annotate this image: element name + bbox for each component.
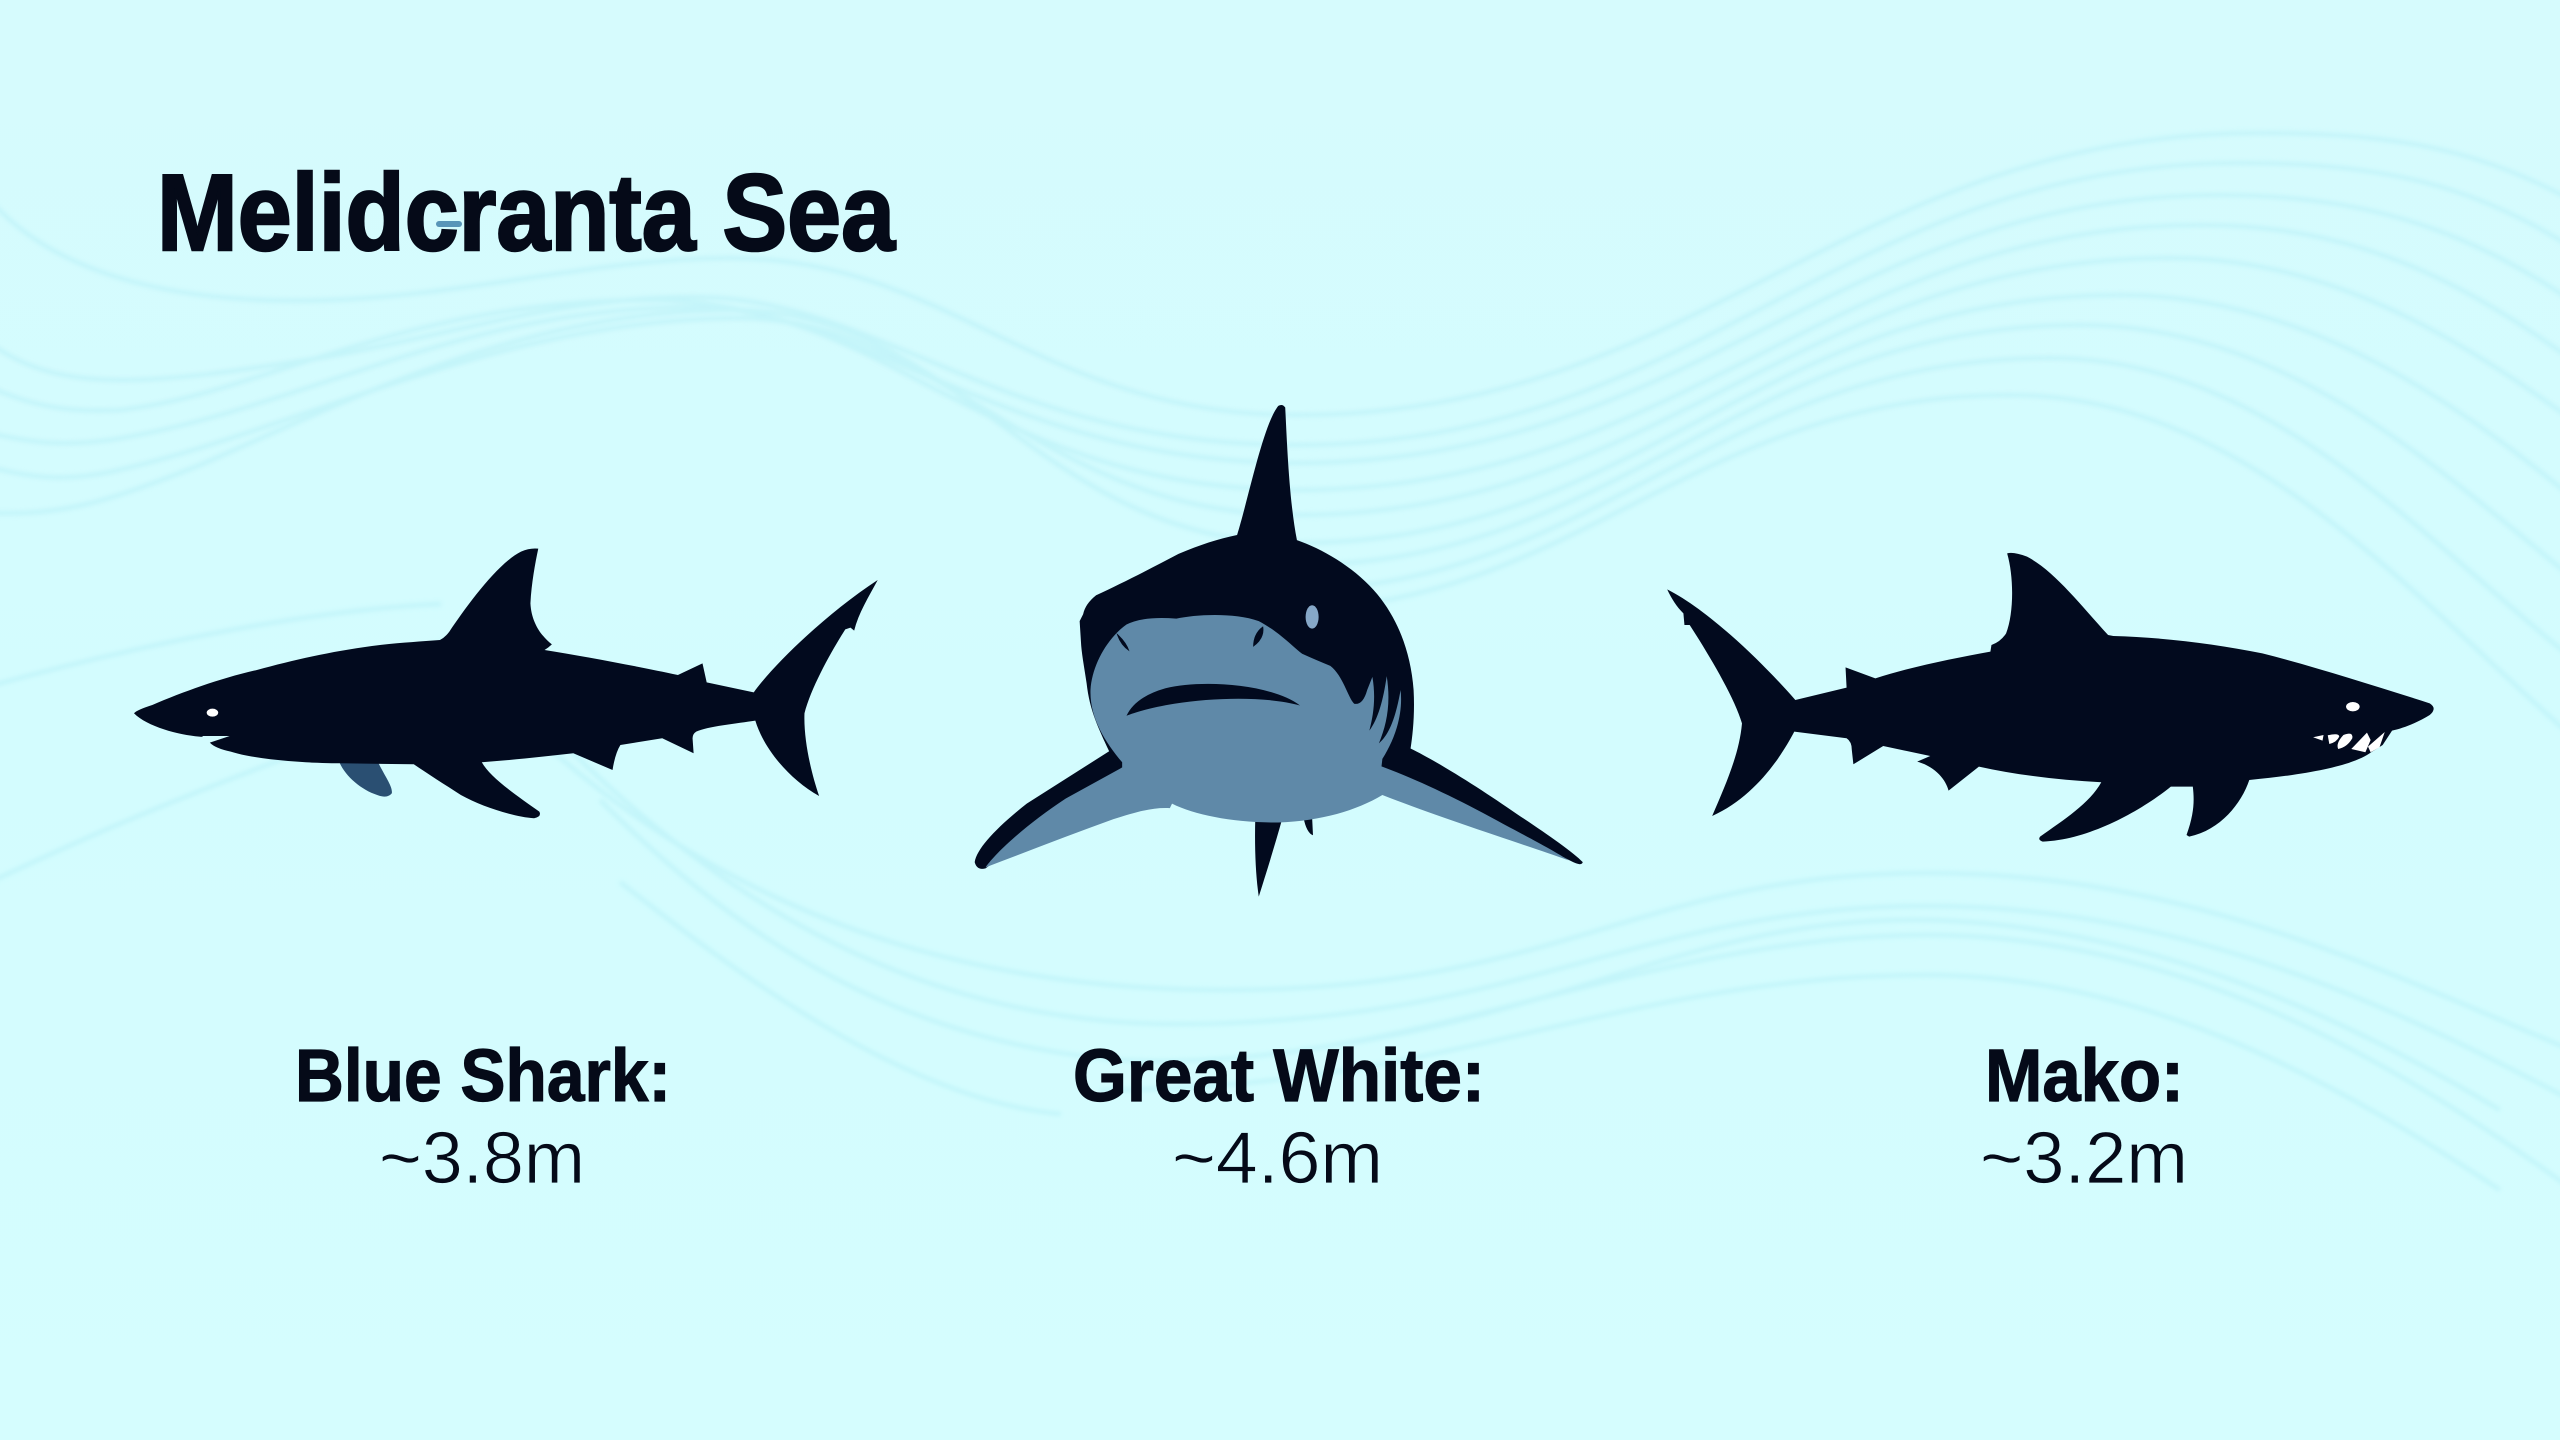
shark: blue shark side silhouette <box>134 548 878 818</box>
body silhouette <box>1667 553 2434 842</box>
shark: great white front view <box>975 405 1583 897</box>
label: mako: ~3.2m <box>1980 1118 2188 1199</box>
label: great white: Great White: <box>1073 1034 1485 1117</box>
label: great white <box>1073 1034 1485 1199</box>
tail fins <box>1255 817 1313 897</box>
body silhouette <box>134 548 878 818</box>
mouth <box>1126 684 1300 716</box>
label: great white: ~4.6m <box>1172 1118 1383 1199</box>
label: blue shark: ~3.8m <box>379 1118 585 1199</box>
eye <box>207 709 218 717</box>
teeth <box>2313 732 2385 752</box>
nostrils <box>1117 626 1263 651</box>
background wave lines <box>0 133 2560 1210</box>
eye <box>1306 605 1319 629</box>
label: blue shark: Blue Shark: <box>295 1034 671 1117</box>
eye <box>2346 702 2360 711</box>
dark upper body <box>975 405 1583 869</box>
label: blue shark <box>295 1034 671 1199</box>
label: mako: Mako: <box>1985 1034 2184 1117</box>
pale belly <box>986 615 1569 867</box>
pectoral fin in blue <box>340 763 392 797</box>
shark: mako side silhouette with teeth <box>1667 553 2434 842</box>
label: mako <box>1980 1034 2188 1199</box>
title: Melidcranta Sea <box>157 152 896 274</box>
